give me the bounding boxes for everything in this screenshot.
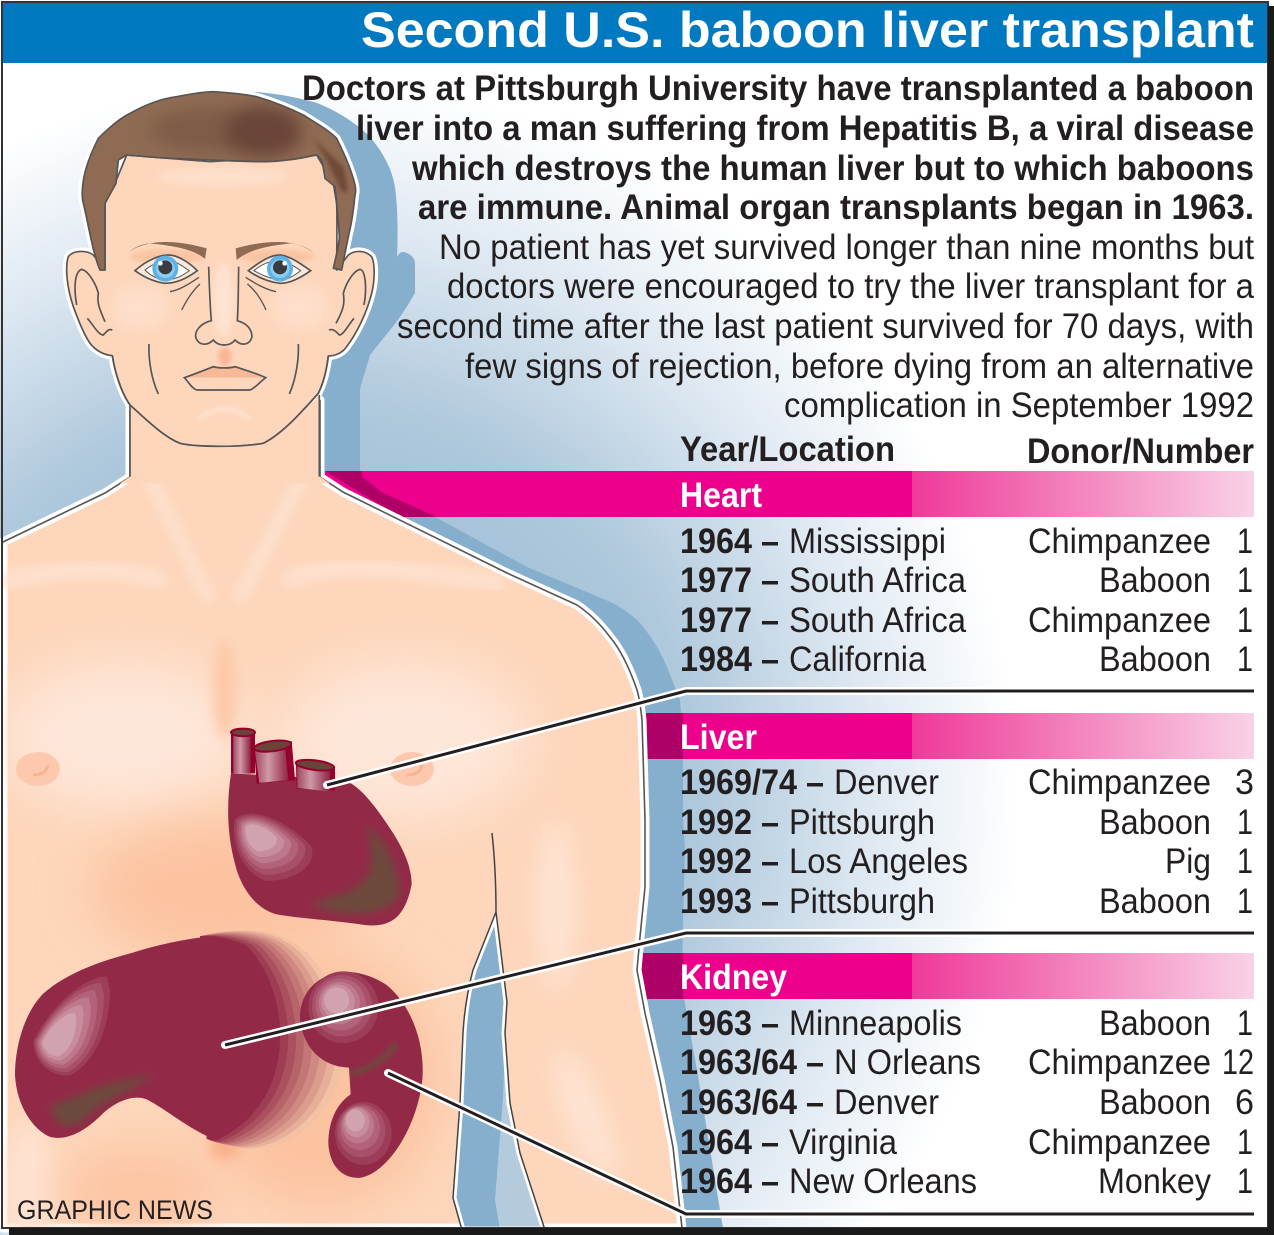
table rows: kidney: Baboon bbox=[1099, 1004, 1211, 1043]
table rows: liver: Baboon bbox=[1099, 803, 1211, 842]
liver main body bbox=[15, 936, 217, 1140]
right ear detail bbox=[329, 269, 366, 335]
table rows: heart bbox=[680, 522, 1253, 679]
liver highlight bbox=[33, 976, 110, 1076]
left eye bbox=[135, 255, 200, 310]
table rows: kidney: Denver bbox=[834, 1083, 939, 1122]
table rows: heart: Baboon bbox=[1099, 640, 1211, 679]
jaw line bbox=[112, 356, 328, 446]
table rows: kidney bbox=[680, 1004, 1254, 1201]
table rows: kidney: 1963/64 – bbox=[680, 1043, 824, 1082]
table rows: kidney: 6 bbox=[1235, 1083, 1254, 1122]
table rows: liver: Pittsburgh bbox=[789, 803, 935, 842]
label: Heart: Heart bbox=[680, 476, 762, 515]
table rows: kidney: 1963/64 – bbox=[680, 1083, 824, 1122]
kidney lower highlight bbox=[335, 1102, 392, 1165]
table rows: heart: Baboon bbox=[1099, 561, 1211, 600]
neck bbox=[120, 395, 330, 483]
table rows: heart: California bbox=[789, 640, 926, 679]
table rows: kidney: Monkey bbox=[1098, 1162, 1211, 1201]
leader line: liver bbox=[225, 933, 1254, 1045]
icon: navel bbox=[210, 1134, 240, 1160]
hair bbox=[82, 92, 356, 270]
table rows: kidney: 1964 – bbox=[680, 1162, 779, 1201]
title banner bbox=[3, 2, 1269, 63]
kidney upper highlight bbox=[308, 971, 378, 1043]
table rows: liver: 3 bbox=[1235, 763, 1254, 802]
head white halo and skin bbox=[67, 155, 374, 446]
table rows: heart: Chimpanzee bbox=[1028, 601, 1211, 640]
figure shadow in blue bbox=[200, 92, 723, 1228]
table rows: liver: Baboon bbox=[1099, 882, 1211, 921]
intro text bbox=[302, 69, 1254, 425]
table rows: liver: 1 bbox=[1237, 882, 1253, 921]
label: Kidney: Kidney bbox=[680, 958, 787, 997]
section bar: Liver bbox=[630, 713, 1254, 759]
table rows: heart: Chimpanzee bbox=[1028, 522, 1211, 561]
table rows: heart: 1 bbox=[1237, 561, 1253, 600]
table rows: heart: Mississippi bbox=[789, 522, 946, 561]
table rows: liver: 1993 – bbox=[680, 882, 779, 921]
table rows: kidney: New Orleans bbox=[789, 1162, 977, 1201]
kidney dark crease bbox=[352, 1043, 397, 1074]
table rows: liver bbox=[680, 763, 1254, 921]
title: Second U.S. baboon liver transplant bbox=[361, 2, 1254, 58]
section bar: Kidney bbox=[630, 953, 1254, 999]
table column headings bbox=[680, 430, 1254, 471]
mouth bbox=[184, 367, 266, 390]
table rows: heart: 1977 – bbox=[680, 561, 779, 600]
table rows: kidney: N Orleans bbox=[834, 1043, 981, 1082]
liver dark shading bbox=[50, 1075, 155, 1126]
table rows: heart: South Africa bbox=[789, 601, 966, 640]
organ: liver bbox=[15, 930, 343, 1149]
vessel 2 bbox=[254, 739, 295, 784]
table rows: liver: Pig bbox=[1165, 842, 1211, 881]
face highlights bbox=[112, 167, 328, 418]
table rows: heart: 1984 – bbox=[680, 640, 779, 679]
hair white halo bbox=[82, 92, 356, 270]
human torso bbox=[0, 400, 682, 1235]
table rows: liver: Los Angeles bbox=[789, 842, 968, 881]
table rows: liver: Pittsburgh bbox=[789, 882, 935, 921]
vessel 3 bbox=[295, 758, 335, 791]
organ: heart bbox=[228, 729, 412, 925]
table rows: heart: 1 bbox=[1237, 522, 1253, 561]
table rows: kidney: 1 bbox=[1237, 1123, 1253, 1162]
table column headings: Year/Location bbox=[680, 430, 895, 469]
table rows: heart: 1977 – bbox=[680, 601, 779, 640]
section bar: Heart bbox=[325, 471, 1254, 517]
chest highlights bbox=[0, 472, 630, 1235]
table rows: kidney: Chimpanzee bbox=[1028, 1123, 1211, 1162]
right eye bbox=[246, 255, 311, 310]
vessel 1 bbox=[231, 729, 255, 774]
icon: left nipple bbox=[16, 752, 60, 786]
nose bbox=[196, 267, 252, 345]
table rows: liver: Denver bbox=[834, 763, 939, 802]
human head bbox=[67, 92, 374, 483]
table rows: liver: 1969/74 – bbox=[680, 763, 824, 802]
leader line: kidney bbox=[388, 1073, 1254, 1214]
credit: Graphic News: GRAPHIC NEWS bbox=[17, 1195, 213, 1225]
table rows: heart: 1 bbox=[1237, 640, 1253, 679]
table rows: kidney: Chimpanzee bbox=[1028, 1043, 1211, 1082]
table rows: liver: 1 bbox=[1237, 842, 1253, 881]
table rows: kidney: Virginia bbox=[789, 1123, 897, 1162]
liver fading right lobe bbox=[200, 930, 343, 1149]
leader line: heart bbox=[327, 691, 1254, 785]
table rows: kidney: 1 bbox=[1237, 1162, 1253, 1201]
table rows: liver: Chimpanzee bbox=[1028, 763, 1211, 802]
organ: kidney bbox=[300, 971, 423, 1178]
table rows: liver: 1992 – bbox=[680, 803, 779, 842]
bar shadow wedge bbox=[325, 471, 437, 517]
label: Liver: Liver bbox=[680, 718, 757, 757]
table column headings: Donor/Number bbox=[1027, 432, 1254, 471]
table rows: kidney: 1963 – bbox=[680, 1004, 779, 1043]
heart dark shading bbox=[310, 826, 400, 914]
icon: right nipple bbox=[390, 752, 434, 786]
blue gap between arm and torso bbox=[453, 833, 545, 1230]
table rows: kidney: Minneapolis bbox=[789, 1004, 962, 1043]
table rows: heart: 1964 – bbox=[680, 522, 779, 561]
table rows: liver: 1992 – bbox=[680, 842, 779, 881]
cheek lines bbox=[149, 344, 298, 394]
table rows: kidney: Baboon bbox=[1099, 1083, 1211, 1122]
table rows: heart: South Africa bbox=[789, 561, 966, 600]
table rows: liver: 1 bbox=[1237, 803, 1253, 842]
philtrum bbox=[218, 347, 232, 366]
table rows: kidney: 1 bbox=[1237, 1004, 1253, 1043]
abdomen shading bbox=[60, 640, 440, 1230]
table rows: heart: 1 bbox=[1237, 601, 1253, 640]
heart highlight bbox=[234, 814, 312, 881]
table rows: kidney: 1964 – bbox=[680, 1123, 779, 1162]
eyebrows bbox=[128, 242, 313, 264]
left ear detail bbox=[75, 269, 112, 335]
table rows: kidney: 12 bbox=[1222, 1043, 1254, 1082]
intro text: complication in September 1992 bbox=[784, 386, 1254, 425]
